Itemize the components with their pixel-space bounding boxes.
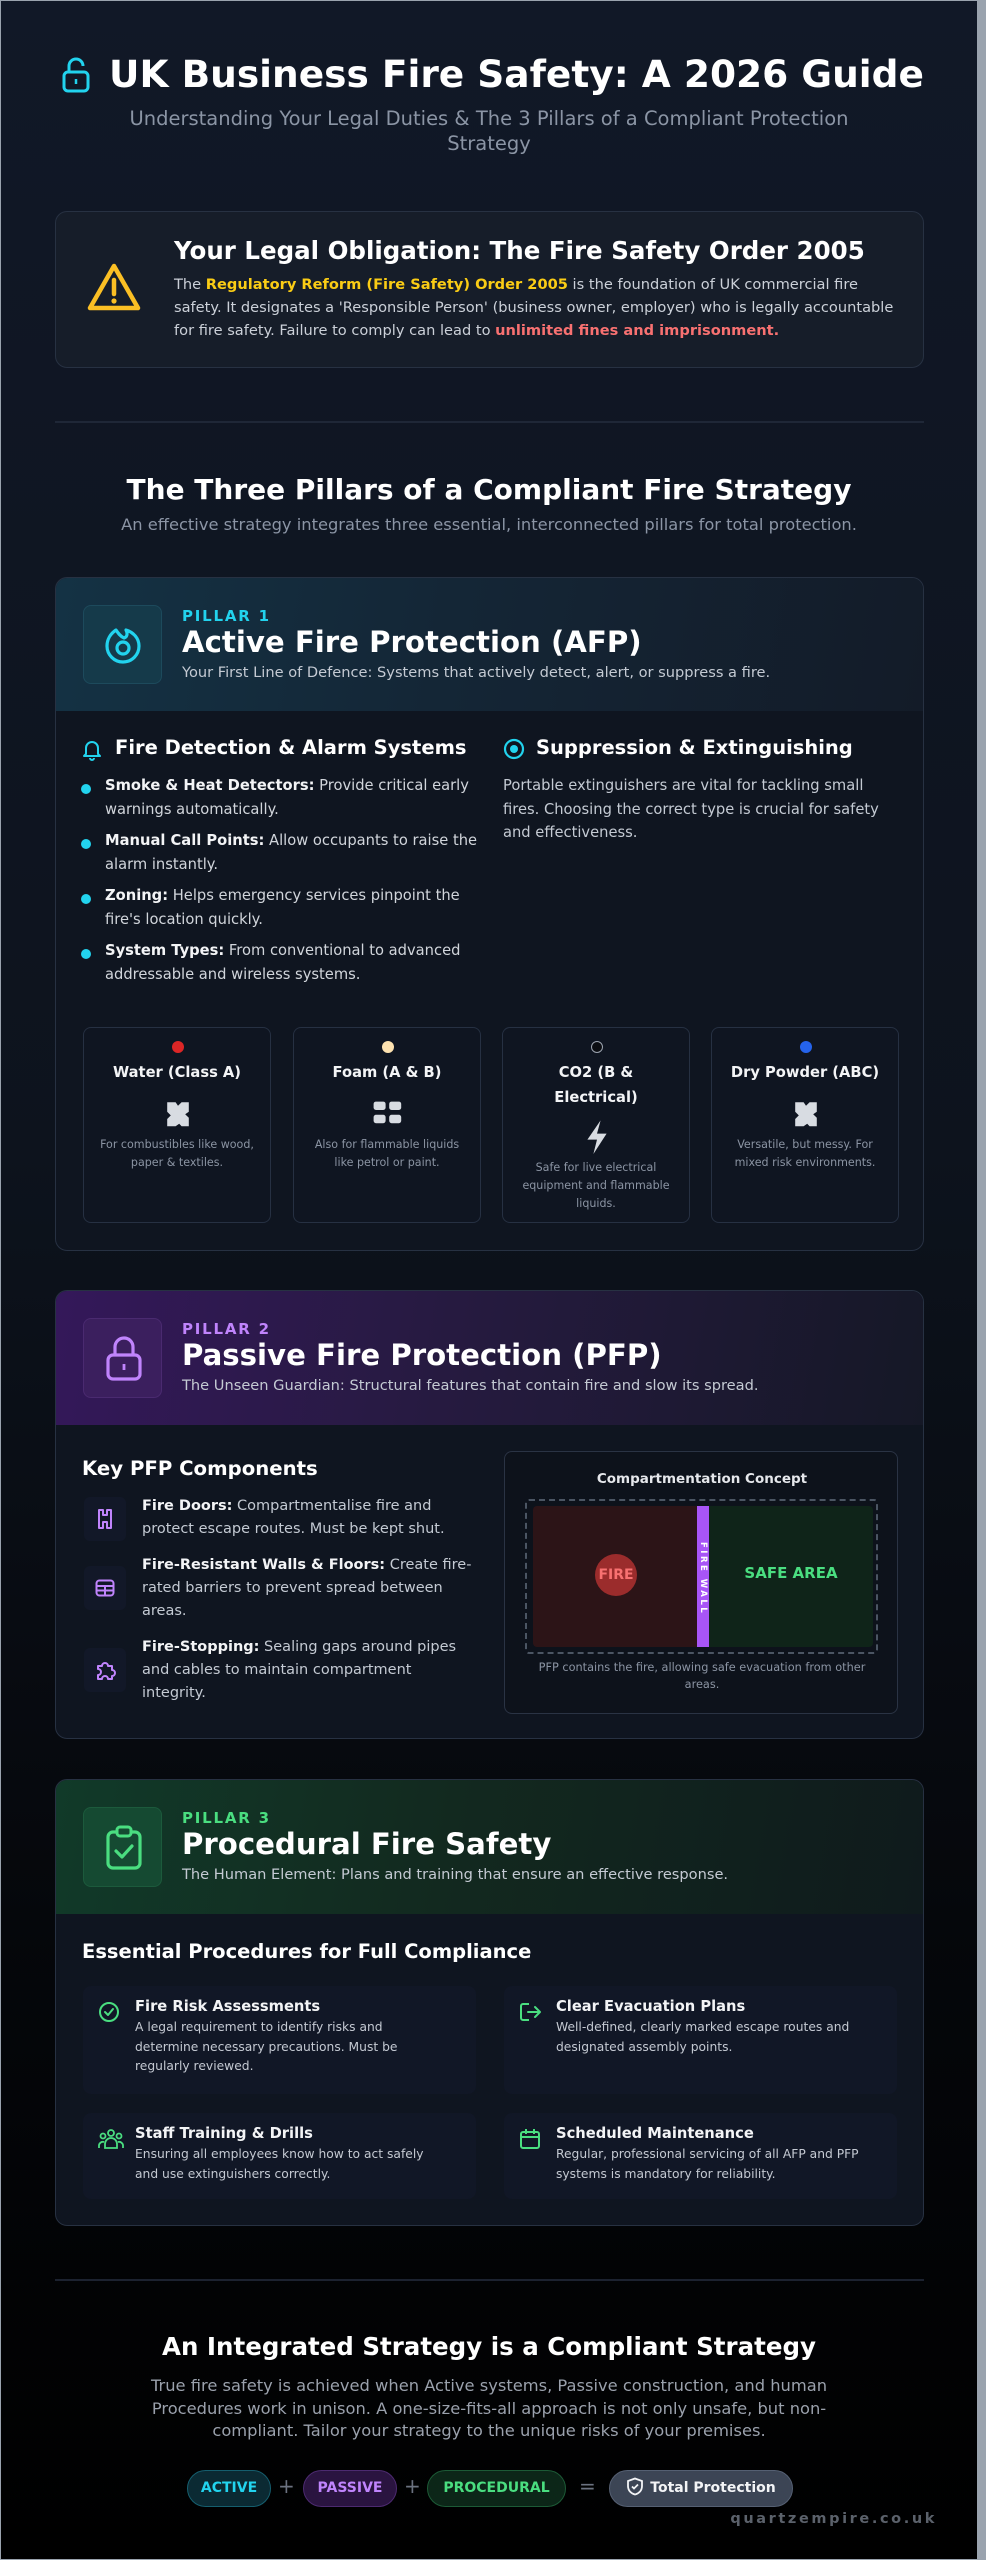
extinguisher card: co2: Electrical): [554, 1089, 638, 1106]
box: evacuation plans: Clear Evacuation Plans: [556, 1998, 745, 2015]
section: detection: Smoke & Heat Detectors: Provide critical early: [105, 777, 469, 794]
footer brand: quartzempire.co.uk: [730, 2511, 937, 2527]
text block: [174, 276, 893, 339]
extinguisher card: foam: [293, 1027, 481, 1223]
title: UK Business Fire Safety: A 2026 Guide: [109, 52, 924, 96]
text block: The Regulatory Reform (Fire Safety) Order 2005 is the foundation of UK commercial fire: [174, 276, 858, 293]
item: walls: [96, 1557, 471, 1619]
heading: Your Legal Obligation: The Fire Safety Order 2005: [174, 236, 865, 265]
box: risk assessments: Fire Risk Assessments: [135, 1998, 320, 2015]
icon: warning: [88, 264, 140, 310]
header: Your First Line of Defence: Systems that actively detect, alert, or suppress a fire.: [182, 664, 770, 681]
equation pills: [187, 2470, 793, 2507]
header: [56, 1780, 925, 1914]
box: staff training: Ensuring all employees know how to act safely: [135, 2147, 424, 2161]
extinguisher card: co2: liquids.: [576, 1197, 616, 1210]
fire marker: [595, 1554, 637, 1596]
section: detection: warnings automatically.: [105, 800, 279, 818]
extinguisher card: foam: Foam (A & B): [333, 1064, 441, 1081]
panel: pillar 1 active: [55, 577, 924, 1251]
fire marker: FIRE: [598, 1567, 634, 1583]
section: detection: fire's location quickly.: [105, 910, 263, 928]
item: fire stopping: integrity.: [142, 1685, 206, 1701]
equation pills: ACTIVE: [201, 2480, 257, 2496]
section: detection: System Types: From conventional to advanced: [105, 942, 460, 959]
item: fire doors: Fire Doors: Compartmentalise fire and: [142, 1498, 431, 1514]
section: suppression: Portable extinguishers are vital for tackling small: [503, 777, 863, 794]
extinguisher card: water: paper & textiles.: [131, 1156, 223, 1169]
extinguisher card: co2: Safe for live electrical: [536, 1161, 656, 1174]
text block: conclusion: compliant. Tailor your strategy to the unique risks of your premises.: [212, 2421, 766, 2440]
box: maintenance: [504, 2113, 897, 2199]
item: walls: areas.: [142, 1603, 186, 1619]
extinguisher card: co2: CO2 (B &: [559, 1064, 633, 1081]
item: fire doors: protect escape routes. Must be kept shut.: [142, 1521, 445, 1537]
extinguisher card: water: Water (Class A): [113, 1064, 241, 1081]
extinguisher card: dry powder: mixed risk environments.: [735, 1156, 875, 1169]
total protection: Total Protection: [650, 2480, 776, 2496]
fire wall: FIRE WALL: [698, 1542, 708, 1615]
header: PILLAR 2: [182, 1320, 271, 1338]
section: detection: Zoning: Helps emergency services pinpoint the: [105, 887, 460, 904]
equation pills: PROCEDURAL: [443, 2480, 550, 2496]
text block: safety. It designates a 'Responsible Person' (business owner, employer) who is legally accountable: [174, 299, 893, 316]
section: key pfp components: [82, 1457, 471, 1701]
box: evacuation plans: Well-defined, clearly marked escape routes and: [556, 2020, 849, 2034]
box: evacuation plans: designated assembly points.: [556, 2040, 732, 2054]
box: risk assessments: A legal requirement to identify risks and: [135, 2020, 383, 2034]
header: PILLAR 3: [182, 1809, 271, 1827]
subtitle: Understanding Your Legal Duties & The 3 Pillars of a Compliant Protection: [129, 107, 849, 130]
extinguisher card: water: [83, 1027, 271, 1223]
section: detection: alarm instantly.: [105, 856, 218, 872]
header: Passive Fire Protection (PFP): [182, 1338, 662, 1372]
fire wall: [697, 1506, 709, 1647]
section: suppression: and effectiveness.: [503, 824, 637, 841]
icon: lock: [62, 58, 90, 92]
text block: for fire safety. Failure to comply can lead to unlimited fines and imprisonment.: [174, 322, 779, 339]
header: The Unseen Guardian: Structural features that contain fire and slow its spread.: [182, 1377, 758, 1394]
chart: compartmentation concept: areas.: [685, 1678, 719, 1691]
icon: clipboard: [83, 1807, 162, 1887]
heading: three pillars: The Three Pillars of a Compliant Fire Strategy: [127, 473, 851, 506]
total protection: [609, 2470, 793, 2507]
section: detection: addressable and wireless systems.: [105, 966, 360, 982]
section: detection: [81, 736, 477, 982]
extinguisher card: foam: like petrol or paint.: [334, 1156, 440, 1169]
section: suppression: Suppression & Extinguishing: [536, 736, 853, 759]
item: fire stopping: and cables to maintain compartment: [142, 1662, 411, 1678]
box: staff training: [83, 2113, 476, 2199]
section: detection: Manual Call Points: Allow occupants to raise the: [105, 832, 477, 849]
subheading: An effective strategy integrates three essential, interconnected pillars for total protection.: [121, 515, 857, 534]
panel: pillar 2 passive: [55, 1290, 924, 1739]
extinguisher card: co2: equipment and flammable: [522, 1179, 670, 1192]
equation pills: +: [404, 2474, 421, 2498]
box: staff training: Staff Training & Drills: [135, 2125, 313, 2142]
extinguisher card: dry powder: Dry Powder (ABC): [731, 1064, 879, 1081]
section: suppression: [503, 736, 879, 841]
box: maintenance: Scheduled Maintenance: [556, 2125, 754, 2142]
icon: fire: [83, 605, 162, 684]
panel: legal obligation: [55, 211, 924, 368]
section: detection: Fire Detection & Alarm Systems: [115, 736, 467, 759]
chart: compartmentation concept: PFP contains the fire, allowing safe evacuation from other: [539, 1661, 865, 1674]
box: maintenance: Regular, professional servicing of all AFP and PFP: [556, 2147, 859, 2161]
subtitle: Strategy: [447, 132, 531, 155]
icon: target: [504, 738, 524, 760]
item: fire doors: [98, 1498, 445, 1537]
box: risk assessments: regularly reviewed.: [135, 2059, 254, 2073]
extinguisher card: foam: Also for flammable liquids: [315, 1138, 459, 1151]
heading: integrated strategy: An Integrated Strategy is a Compliant Strategy: [162, 2332, 816, 2361]
header: [56, 578, 925, 711]
icon: bell: [83, 741, 101, 761]
box: risk assessments: determine necessary precautions. Must be: [135, 2040, 397, 2054]
box: staff training: and use extinguishers correctly.: [135, 2166, 330, 2180]
text block: conclusion: True fire safety is achieved when Active systems, Passive construction, and human: [151, 2376, 827, 2395]
subtitle: [129, 107, 849, 155]
equation pills: =: [579, 2474, 596, 2498]
panel: pillar 3 procedural: [55, 1779, 924, 2226]
extinguisher card: dry powder: Versatile, but messy. For: [737, 1138, 873, 1151]
section: suppression: fires. Choosing the correct type is crucial for safety: [503, 800, 879, 818]
item: walls: rated barriers to prevent spread between: [142, 1580, 443, 1596]
box: evacuation plans: [504, 1986, 897, 2094]
header: [56, 1291, 925, 1425]
box: maintenance: systems is mandatory for reliability.: [556, 2166, 776, 2180]
item: fire stopping: Fire-Stopping: Sealing gaps around pipes: [142, 1639, 456, 1655]
header: The Human Element: Plans and training that ensure an effective response.: [182, 1866, 728, 1883]
header: Active Fire Protection (AFP): [182, 625, 642, 659]
heading: essential procedures: Essential Procedures for Full Compliance: [82, 1940, 531, 1963]
item: walls: Fire-Resistant Walls & Floors: Create fire-: [142, 1557, 471, 1573]
equation pills: PASSIVE: [318, 2480, 382, 2496]
item: fire stopping: [97, 1639, 456, 1701]
text block: conclusion: [150, 2376, 827, 2440]
equation pills: +: [278, 2474, 295, 2498]
chart: compartmentation concept: SAFE AREA: [744, 1564, 838, 1582]
box: risk assessments: [83, 1986, 476, 2094]
header: PILLAR 1: [182, 607, 271, 625]
chart: compartmentation concept: Compartmentation Concept: [597, 1471, 807, 1487]
extinguisher card: water: For combustibles like wood,: [100, 1138, 254, 1151]
icon: lock: [83, 1318, 162, 1398]
extinguisher card: dry powder: [711, 1027, 899, 1223]
extinguisher card: co2: [502, 1027, 690, 1223]
header: Procedural Fire Safety: [182, 1827, 551, 1861]
text block: conclusion: Procedures work in unison. A one-size-fits-all approach is not only unsafe, but non-: [152, 2399, 826, 2418]
section: key pfp components: Key PFP Components: [82, 1457, 318, 1480]
chart: compartmentation concept: [504, 1451, 898, 1714]
